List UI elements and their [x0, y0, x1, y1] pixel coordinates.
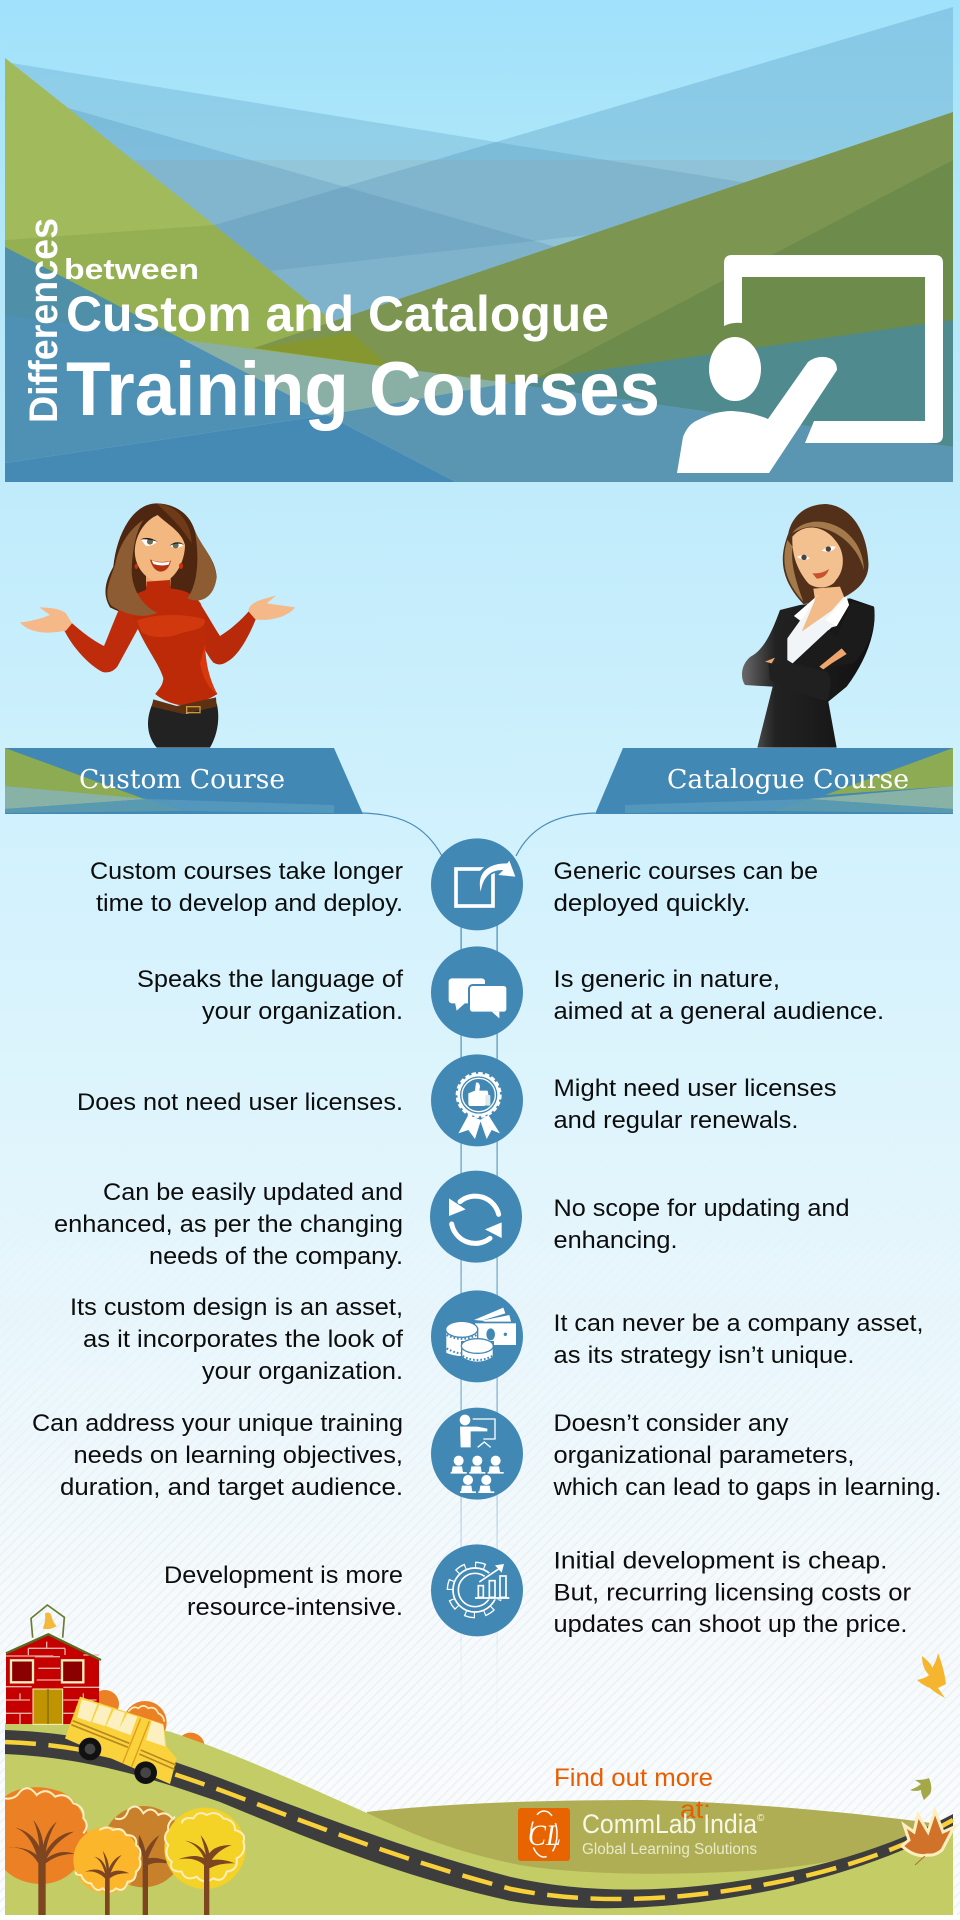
icon: deploy arrow — [431, 838, 523, 930]
point 7 left — [164, 1562, 403, 1621]
point 2 right: Is generic in nature, — [554, 966, 780, 993]
column: catalogue course points — [552, 858, 942, 1638]
point 6 left: needs on learning objectives, — [74, 1442, 403, 1469]
point 4 left: enhanced, as per the changing — [54, 1211, 403, 1238]
word: Differences: Differences — [22, 218, 66, 423]
icon: speech bubbles — [431, 946, 523, 1038]
scenery: back hill — [367, 1800, 953, 1880]
title — [22, 218, 660, 432]
point 6 right: which can lead to gaps in learning. — [552, 1474, 942, 1501]
icon: money and coins — [431, 1290, 523, 1382]
point 5 left: as it incorporates the look of — [83, 1326, 403, 1353]
point 6 left — [32, 1410, 403, 1501]
illustration: catalogue course woman — [742, 504, 875, 748]
connector lines — [362, 813, 595, 1760]
call to action — [554, 1764, 713, 1824]
point 6 right: organizational parameters, — [554, 1442, 854, 1469]
hatch texture on lower background — [0, 1509, 960, 1915]
logo: CommLab India: CommLab India — [582, 1809, 758, 1839]
point 2 right — [554, 966, 884, 1025]
logo: CommLab India: Global Learning Solutions — [582, 1841, 757, 1858]
point 4 right — [554, 1195, 850, 1254]
scenery: background bushes — [91, 1690, 205, 1761]
point 2 right: aimed at a general audience. — [554, 998, 884, 1025]
point 4 left: needs of the company. — [149, 1243, 403, 1270]
illustration: school bus — [65, 1697, 177, 1784]
point 7 right — [554, 1548, 911, 1638]
point 2 left: Speaks the language of — [137, 966, 403, 993]
illustration: red school house — [6, 1605, 101, 1724]
point 5 right: It can never be a company asset, — [554, 1310, 924, 1337]
icon: trainer with audience — [431, 1408, 523, 1500]
point 6 left: duration, and target audience. — [60, 1474, 403, 1501]
point 1 left — [90, 858, 403, 917]
icon: teacher at board — [677, 255, 943, 473]
word: between: between — [64, 254, 199, 286]
point 7 left: resource-intensive. — [187, 1594, 403, 1621]
line: Training Courses: Training Courses — [66, 347, 660, 432]
point 4 right: No scope for updating and — [554, 1195, 850, 1222]
icon: thumbs-up badge — [431, 1054, 523, 1146]
point 7 right: updates can shoot up the price. — [554, 1611, 908, 1638]
point 6 right: Doesn’t consider any — [554, 1410, 789, 1437]
column: custom course points — [32, 858, 403, 1621]
point 1 left: Custom courses take longer — [90, 858, 403, 885]
point 1 left: time to develop and deploy. — [96, 890, 403, 917]
point 4 left — [54, 1179, 403, 1270]
logo: CommLab India — [518, 1808, 765, 1861]
point 7 right: But, recurring licensing costs or — [554, 1580, 911, 1606]
point 5 right — [554, 1310, 924, 1369]
banner: catalogue course: Catalogue Course — [667, 765, 909, 795]
point 1 right — [554, 858, 818, 917]
point 5 right: as its strategy isn’t unique. — [554, 1342, 854, 1369]
icon: refresh arrows — [430, 1171, 522, 1263]
icon: gear and growth chart — [431, 1544, 523, 1636]
point 5 left — [70, 1294, 403, 1385]
leaf: small green leaf — [910, 1778, 931, 1800]
illustration: custom course woman — [20, 503, 295, 748]
point 7 right: Initial development is cheap. — [554, 1548, 888, 1574]
point 3 left: Does not need user licenses. — [77, 1089, 403, 1116]
scenery: road — [5, 1730, 953, 1908]
line: Custom and Catalogue: Custom and Catalogue — [66, 286, 609, 342]
point 7 left: Development is more — [164, 1562, 403, 1589]
banner: custom course: Custom Course — [79, 765, 285, 795]
leaf: golden leaf — [917, 1653, 946, 1698]
point 1 right: Generic courses can be — [554, 858, 818, 885]
bottom white strip — [0, 1915, 960, 1920]
point 2 left: your organization. — [202, 998, 403, 1025]
point 3 right: Might need user licenses — [554, 1075, 836, 1102]
banner: custom course — [5, 748, 363, 814]
call to action: Find out more — [554, 1764, 713, 1792]
point 5 left: Its custom design is an asset, — [70, 1294, 403, 1321]
header panel background — [5, 0, 953, 482]
leaf: large maple leaf — [902, 1811, 954, 1865]
point 3 right: and regular renewals. — [554, 1107, 798, 1134]
point 5 left: your organization. — [202, 1358, 403, 1385]
point 4 left: Can be easily updated and — [103, 1179, 403, 1206]
logo: CommLab India: CL — [528, 1819, 561, 1852]
point 1 right: deployed quickly. — [554, 890, 750, 917]
banner: catalogue course — [595, 748, 953, 814]
scenery: front hill — [5, 1722, 953, 1915]
point 3 right — [554, 1075, 836, 1134]
point 6 left: Can address your unique training — [32, 1410, 403, 1437]
illustration: autumn trees — [5, 1787, 246, 1915]
point 6 right — [552, 1410, 942, 1501]
point 4 right: enhancing. — [554, 1227, 678, 1254]
logo: CommLab India: © — [757, 1813, 765, 1824]
point 2 left — [137, 966, 403, 1025]
call to action: at: — [680, 1796, 711, 1824]
